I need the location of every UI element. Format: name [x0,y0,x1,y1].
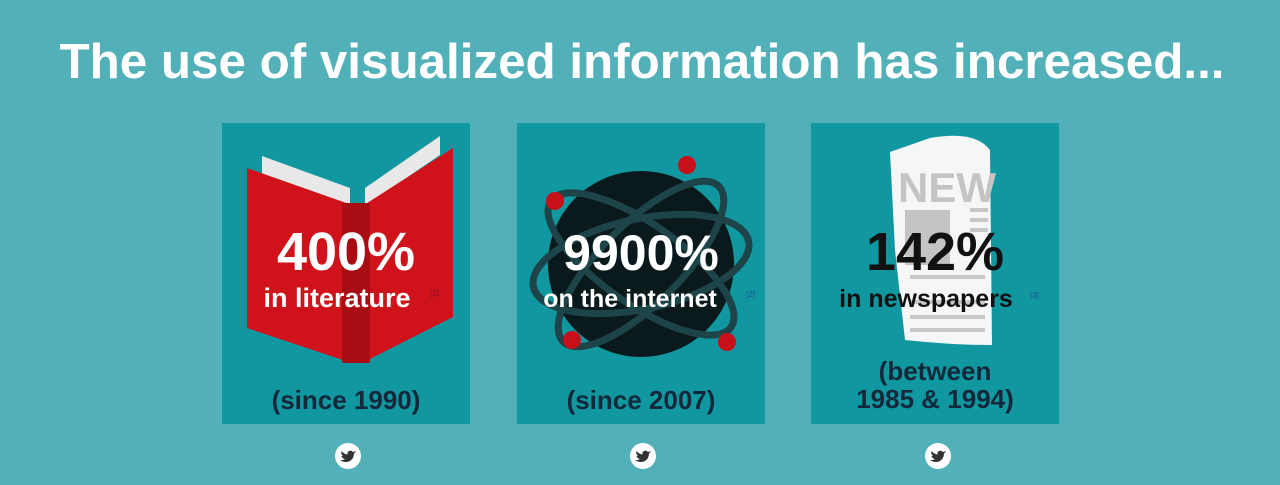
icon: newspaper: NEW [898,164,996,211]
stat text: 400% [277,222,415,282]
date text: (since 2007) [567,385,715,415]
stat text: 9900% [563,225,719,281]
icon: twitter 1 [335,443,361,469]
panel: literature: [1] [430,289,439,298]
icon: globe with orbits [524,156,758,370]
date text: (since 1990) [272,385,420,415]
title: The use of visualized information has increased... [60,35,1224,89]
panel: internet: on the internet [543,285,717,313]
panel: newspapers: [3] [1030,291,1039,300]
icon: newspaper [890,136,996,345]
icon: twitter 3 [925,443,951,469]
stat text: 142% [866,222,1004,282]
panel: newspapers: 1985 & 1994) [856,384,1014,414]
date text: (between [879,356,991,386]
panel: internet [517,123,765,424]
panel: newspapers [811,123,1059,424]
icon: book [247,136,453,363]
panel: newspapers: in newspapers [839,285,1013,313]
panel: internet: [2] [746,290,755,299]
panel: literature [222,123,470,424]
panel: literature: in literature [263,283,411,313]
icon: twitter 2 [630,443,656,469]
